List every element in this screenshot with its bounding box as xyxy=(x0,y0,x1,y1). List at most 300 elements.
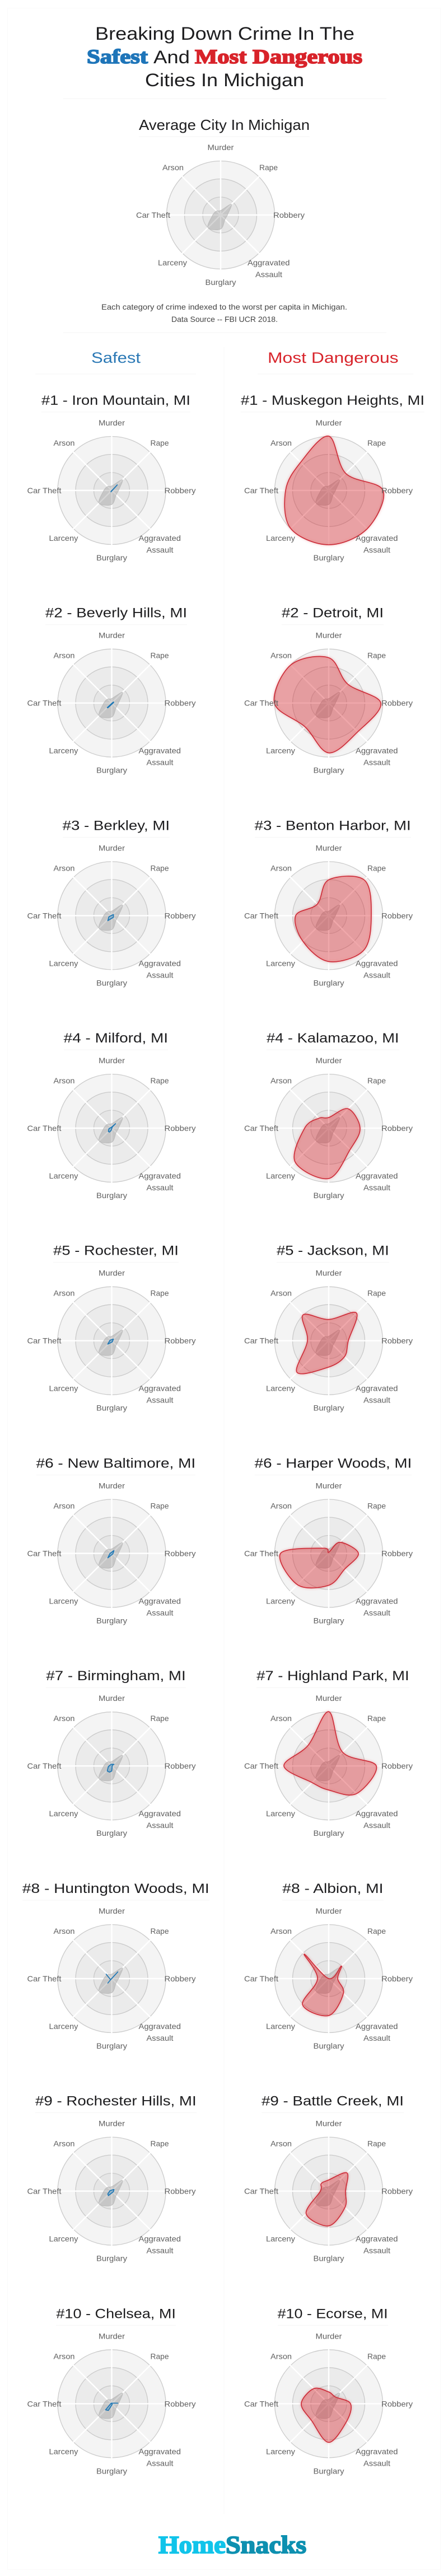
city title: #10 - Chelsea, MI xyxy=(56,2306,176,2321)
axis labels: Arson xyxy=(270,863,292,872)
axis labels: Burglary xyxy=(96,1404,127,1413)
axis labels: Burglary xyxy=(314,1829,344,1838)
axis labels: Rape xyxy=(367,1927,386,1935)
axis labels: Robbery xyxy=(381,699,413,708)
axis labels: Rape xyxy=(150,438,169,447)
radar chart xyxy=(244,418,413,562)
axis labels: Car Theft xyxy=(27,2399,62,2408)
axis labels: Burglary xyxy=(205,278,236,287)
radar chart xyxy=(27,1481,196,1625)
axis labels: Larceny xyxy=(49,959,78,967)
axis labels xyxy=(244,1906,413,2050)
axis labels: Burglary xyxy=(96,2254,127,2263)
axis labels: Murder xyxy=(316,418,342,427)
axis labels: Larceny xyxy=(266,1171,295,1180)
axis labels: Assault xyxy=(363,2246,390,2255)
axis labels: Arson xyxy=(54,651,75,660)
axis labels: Car Theft xyxy=(244,2399,278,2408)
city title: #1 - Iron Mountain, MI xyxy=(41,393,190,408)
radar grid xyxy=(273,2348,384,2459)
axis labels: Arson xyxy=(54,2351,75,2360)
city shape xyxy=(279,1542,358,1588)
axis labels: Car Theft xyxy=(27,1124,62,1133)
axis labels: Murder xyxy=(99,2331,125,2340)
radar chart xyxy=(27,2119,196,2263)
axis labels: Assault xyxy=(147,1183,174,1192)
panel: dangerous #7 Highland Park xyxy=(244,1668,413,1838)
axis labels: Burglary xyxy=(314,1616,344,1625)
axis labels: Arson xyxy=(54,2139,75,2148)
axis labels: Car Theft xyxy=(27,911,62,920)
axis labels: Murder xyxy=(316,631,342,640)
radar grid xyxy=(165,160,276,270)
radar chart xyxy=(244,1056,413,1200)
axis labels: Rape xyxy=(367,863,386,872)
axis labels: Car Theft xyxy=(244,486,278,495)
radar grid xyxy=(56,1498,167,1609)
axis labels: Rape xyxy=(150,2351,169,2360)
axis labels: Murder xyxy=(316,1269,342,1278)
axis labels: Assault xyxy=(363,1183,390,1192)
heading: most dangerous column: Most Dangerous xyxy=(268,349,399,366)
axis labels: Assault xyxy=(147,758,174,767)
radar chart xyxy=(244,1481,413,1625)
radar chart xyxy=(27,1906,196,2050)
axis labels: Larceny xyxy=(49,2234,78,2243)
axis labels: Arson xyxy=(270,651,292,660)
axis labels: Larceny xyxy=(266,2234,295,2243)
panel: dangerous #2 Detroit xyxy=(244,606,413,775)
city shape xyxy=(295,876,371,962)
axis labels: Aggravated xyxy=(139,2234,181,2243)
axis labels: Arson xyxy=(54,863,75,872)
axis labels xyxy=(27,1481,196,1625)
axis labels: Arson xyxy=(270,438,292,447)
city shape xyxy=(294,1109,360,1179)
city shape xyxy=(302,1954,344,2016)
axis labels: Assault xyxy=(147,970,174,979)
panel: dangerous #9 Battle Creek xyxy=(244,2094,413,2263)
axis labels: Murder xyxy=(316,2331,342,2340)
heading: safest column: Safest xyxy=(91,349,141,366)
axis labels: Murder xyxy=(316,2119,342,2128)
axis labels: Car Theft xyxy=(244,1761,278,1770)
axis labels: Aggravated xyxy=(248,258,290,267)
axis labels: Murder xyxy=(207,143,234,152)
axis labels: Murder xyxy=(99,631,125,640)
axis labels: Burglary xyxy=(314,553,344,562)
axis labels xyxy=(244,2119,413,2263)
axis labels: Robbery xyxy=(165,1974,196,1983)
city title: #6 - Harper Woods, MI xyxy=(255,1456,412,1471)
axis labels: Murder xyxy=(99,1694,125,1703)
axis labels: Car Theft xyxy=(27,1761,62,1770)
axis labels: Robbery xyxy=(165,1761,196,1770)
axis labels: Car Theft xyxy=(27,699,62,708)
axis labels: Car Theft xyxy=(244,1124,278,1133)
axis labels: Larceny xyxy=(49,2447,78,2456)
axis labels: Aggravated xyxy=(139,1809,181,1818)
axis labels xyxy=(244,843,413,987)
axis labels: Assault xyxy=(147,2033,174,2042)
axis labels: Larceny xyxy=(266,2447,295,2456)
axis labels: Car Theft xyxy=(27,1549,62,1558)
axis labels: Arson xyxy=(54,1289,75,1298)
axis labels: Robbery xyxy=(381,2187,413,2196)
axis labels xyxy=(244,1694,413,1838)
title: Cities In Michigan xyxy=(145,70,304,90)
title: Most Dangerous xyxy=(195,45,362,68)
axis labels: Robbery xyxy=(381,911,413,920)
axis labels: Assault xyxy=(147,2246,174,2255)
radar grid xyxy=(273,435,384,546)
axis labels: Assault xyxy=(363,1608,390,1617)
axis labels xyxy=(27,843,196,987)
city shape xyxy=(108,914,113,920)
axis labels: Robbery xyxy=(273,211,305,219)
radar chart xyxy=(244,1906,413,2050)
axis labels: Arson xyxy=(54,1502,75,1511)
city shape xyxy=(105,2403,118,2410)
city shape xyxy=(111,485,118,492)
radar chart xyxy=(244,843,413,987)
radar chart xyxy=(27,843,196,987)
axis labels: Robbery xyxy=(381,2399,413,2408)
title xyxy=(87,24,362,90)
axis labels: Rape xyxy=(367,1714,386,1723)
axis labels: Robbery xyxy=(381,1761,413,1770)
axis labels xyxy=(244,1269,413,1413)
footnote: Each category of crime indexed to the worst per capita in Michigan. xyxy=(101,302,347,311)
axis labels: Arson xyxy=(54,1076,75,1085)
panel: dangerous #5 Jackson xyxy=(244,1243,413,1413)
axis labels: Burglary xyxy=(314,2041,344,2050)
axis labels: Rape xyxy=(367,1502,386,1511)
axis labels: Car Theft xyxy=(27,1336,62,1345)
axis labels xyxy=(27,2331,196,2475)
axis labels: Aggravated xyxy=(139,2447,181,2456)
axis labels: Larceny xyxy=(158,258,187,267)
panel: dangerous #4 Kalamazoo xyxy=(244,1031,413,1200)
axis labels xyxy=(27,1269,196,1413)
axis labels: Larceny xyxy=(49,2022,78,2031)
panel: dangerous #10 Ecorse xyxy=(244,2306,413,2475)
panel: safest #3 Berkley xyxy=(27,818,196,987)
city title: #5 - Rochester, MI xyxy=(53,1243,179,1259)
city shape xyxy=(108,702,114,708)
axis labels: Burglary xyxy=(314,766,344,775)
city shape xyxy=(108,1551,114,1558)
axis labels: Rape xyxy=(367,2139,386,2148)
radar chart xyxy=(27,2331,196,2475)
panel: dangerous #1 Muskegon Heights xyxy=(241,393,424,562)
axis labels: Rape xyxy=(259,163,278,172)
axis labels: Larceny xyxy=(49,534,78,543)
axis labels xyxy=(27,418,196,562)
axis labels: Car Theft xyxy=(244,1336,278,1345)
city shape xyxy=(108,2190,114,2196)
axis labels: Robbery xyxy=(381,1549,413,1558)
radar grid xyxy=(56,2348,167,2459)
axis labels: Murder xyxy=(316,1906,342,1915)
city title: #4 - Kalamazoo, MI xyxy=(267,1031,399,1046)
axis labels: Robbery xyxy=(381,486,413,495)
axis labels: Rape xyxy=(150,863,169,872)
axis labels: Rape xyxy=(367,651,386,660)
city shape xyxy=(274,656,381,753)
axis labels: Arson xyxy=(270,2139,292,2148)
axis labels: Robbery xyxy=(165,1336,196,1345)
axis labels: Assault xyxy=(147,2458,174,2467)
axis labels: Assault xyxy=(363,1821,390,1830)
axis labels: Robbery xyxy=(165,486,196,495)
panel: safest #10 Chelsea xyxy=(27,2306,196,2475)
radar chart xyxy=(27,1269,196,1413)
footnote: Data Source -- FBI UCR 2018. xyxy=(171,315,278,324)
axis labels: Robbery xyxy=(381,1336,413,1345)
axis labels: Murder xyxy=(99,1906,125,1915)
radar grid xyxy=(273,1285,384,1396)
axis labels: Rape xyxy=(150,1076,169,1085)
city shape xyxy=(108,1764,114,1772)
axis labels: Robbery xyxy=(381,1124,413,1133)
axis labels xyxy=(27,631,196,775)
axis labels: Rape xyxy=(150,1502,169,1511)
footnote xyxy=(101,302,347,324)
axis labels: Burglary xyxy=(96,1829,127,1838)
axis labels: Assault xyxy=(147,1821,174,1830)
axis labels: Burglary xyxy=(96,766,127,775)
city shape xyxy=(284,1712,376,1795)
radar chart xyxy=(27,1056,196,1200)
axis labels: Larceny xyxy=(266,534,295,543)
axis labels: Robbery xyxy=(165,2399,196,2408)
axis labels: Burglary xyxy=(314,2466,344,2475)
axis labels: Rape xyxy=(150,651,169,660)
axis labels: Murder xyxy=(99,843,125,852)
axis labels: Burglary xyxy=(96,2041,127,2050)
axis labels: Larceny xyxy=(49,1171,78,1180)
title: Breaking Down Crime In The xyxy=(95,24,354,44)
axis labels: Robbery xyxy=(165,699,196,708)
axis labels xyxy=(136,143,305,287)
axis labels: Arson xyxy=(162,163,184,172)
axis labels: Murder xyxy=(316,1056,342,1065)
axis labels: Aggravated xyxy=(356,746,398,755)
axis labels: Arson xyxy=(54,438,75,447)
panel: dangerous #8 Albion xyxy=(244,1881,413,2050)
axis labels: Aggravated xyxy=(139,534,181,543)
axis labels: Assault xyxy=(363,2033,390,2042)
axis labels: Assault xyxy=(363,758,390,767)
axis labels: Murder xyxy=(316,1694,342,1703)
axis labels: Aggravated xyxy=(139,746,181,755)
axis labels: Arson xyxy=(54,1927,75,1935)
axis labels: Burglary xyxy=(96,1616,127,1625)
city shape xyxy=(108,1339,113,1344)
axis labels: Aggravated xyxy=(139,959,181,967)
axis labels: Car Theft xyxy=(244,1549,278,1558)
radar chart xyxy=(27,1694,196,1838)
axis labels: Aggravated xyxy=(356,1809,398,1818)
logo: HomeSnacks: Home xyxy=(158,2531,226,2559)
axis labels: Murder xyxy=(99,1056,125,1065)
axis labels: Aggravated xyxy=(356,1171,398,1180)
city shape xyxy=(306,2173,348,2226)
city title: #1 - Muskegon Heights, MI xyxy=(241,393,424,408)
panel: safest #1 Iron Mountain xyxy=(27,393,196,562)
radar grid xyxy=(56,435,167,546)
city shape xyxy=(301,2388,351,2442)
axis labels: Rape xyxy=(150,2139,169,2148)
panel: safest #6 New Baltimore xyxy=(27,1456,196,1625)
city shape xyxy=(296,1312,357,1374)
axis labels: Rape xyxy=(150,1714,169,1723)
axis labels: Murder xyxy=(99,1481,125,1490)
axis labels: Assault xyxy=(363,2458,390,2467)
radar grid xyxy=(273,860,384,971)
panel: safest #8 Huntington Woods xyxy=(22,1881,209,2050)
axis labels: Assault xyxy=(363,1396,390,1405)
axis labels: Aggravated xyxy=(139,1171,181,1180)
city title: #7 - Highland Park, MI xyxy=(256,1668,409,1684)
axis labels: Aggravated xyxy=(356,2447,398,2456)
axis labels: Burglary xyxy=(314,1404,344,1413)
axis labels: Car Theft xyxy=(27,2187,62,2196)
panel: safest #5 Rochester xyxy=(27,1243,196,1413)
axis labels: Murder xyxy=(316,843,342,852)
axis labels: Arson xyxy=(270,1502,292,1511)
axis labels: Aggravated xyxy=(356,2234,398,2243)
axis labels: Assault xyxy=(363,970,390,979)
city title: #7 - Birmingham, MI xyxy=(46,1668,186,1684)
radar grid xyxy=(56,1285,167,1396)
axis labels: Aggravated xyxy=(356,2022,398,2031)
logo: HomeSnacks xyxy=(158,2531,306,2559)
axis labels: Assault xyxy=(363,545,390,554)
axis labels xyxy=(27,1694,196,1838)
axis labels: Arson xyxy=(270,1076,292,1085)
axis labels xyxy=(27,1906,196,2050)
radar grid xyxy=(273,1923,384,2034)
axis labels: Car Theft xyxy=(244,699,278,708)
radar chart xyxy=(244,1269,413,1413)
axis labels: Car Theft xyxy=(244,2187,278,2196)
axis labels: Murder xyxy=(99,1269,125,1278)
title: Safest xyxy=(87,45,148,68)
heading: average city: Average City In Michigan xyxy=(139,116,310,133)
axis labels: Arson xyxy=(270,1714,292,1723)
radar chart xyxy=(244,631,413,775)
axis labels: Aggravated xyxy=(356,959,398,967)
axis labels: Larceny xyxy=(266,1809,295,1818)
axis labels: Rape xyxy=(367,1289,386,1298)
city title: #8 - Huntington Woods, MI xyxy=(22,1881,209,1896)
radar chart xyxy=(244,2331,413,2475)
axis labels: Murder xyxy=(99,2119,125,2128)
radar grid xyxy=(273,1710,384,1821)
city title: #4 - Milford, MI xyxy=(64,1031,168,1046)
axis labels: Car Theft xyxy=(244,1974,278,1983)
city title: #5 - Jackson, MI xyxy=(277,1243,389,1259)
axis labels: Arson xyxy=(270,2351,292,2360)
radar grid xyxy=(273,2136,384,2247)
axis labels: Robbery xyxy=(165,2187,196,2196)
axis labels: Car Theft xyxy=(136,211,170,219)
axis labels: Larceny xyxy=(266,2022,295,2031)
city title: #3 - Berkley, MI xyxy=(63,818,170,833)
radar chart xyxy=(27,418,196,562)
axis labels xyxy=(244,1056,413,1200)
city shape xyxy=(106,1972,118,1983)
axis labels: Larceny xyxy=(49,1809,78,1818)
city title: #10 - Ecorse, MI xyxy=(278,2306,388,2321)
axis labels: Burglary xyxy=(96,1191,127,1200)
axis labels: Assault xyxy=(147,1608,174,1617)
panel: safest #9 Rochester Hills xyxy=(27,2094,197,2263)
axis labels: Arson xyxy=(54,1714,75,1723)
axis labels: Murder xyxy=(316,1481,342,1490)
panel: safest #4 Milford xyxy=(27,1031,196,1200)
radar grid xyxy=(273,648,384,759)
panel: average city xyxy=(101,116,347,324)
axis labels: Arson xyxy=(270,1927,292,1935)
axis labels: Burglary xyxy=(314,978,344,987)
axis labels: Burglary xyxy=(314,2254,344,2263)
axis labels xyxy=(244,631,413,775)
axis labels xyxy=(244,1481,413,1625)
axis labels: Robbery xyxy=(165,911,196,920)
city shape xyxy=(109,1124,115,1132)
city title: #8 - Albion, MI xyxy=(282,1881,383,1896)
axis labels: Larceny xyxy=(266,746,295,755)
axis labels: Arson xyxy=(270,1289,292,1298)
city title: #6 - New Baltimore, MI xyxy=(36,1456,195,1471)
axis labels: Assault xyxy=(255,270,282,279)
panel: dangerous #6 Harper Woods xyxy=(244,1456,413,1625)
panel: safest #2 Beverly Hills xyxy=(27,606,196,775)
axis labels: Larceny xyxy=(266,1384,295,1393)
axis labels: Aggravated xyxy=(356,534,398,543)
axis labels: Assault xyxy=(147,1396,174,1405)
city title: #2 - Beverly Hills, MI xyxy=(45,606,187,621)
axis labels: Burglary xyxy=(314,1191,344,1200)
axis labels: Aggravated xyxy=(356,1597,398,1606)
axis labels xyxy=(244,418,413,562)
title: And xyxy=(153,47,190,67)
radar chart: average city xyxy=(136,143,305,287)
axis labels: Rape xyxy=(150,1289,169,1298)
axis labels: Murder xyxy=(99,418,125,427)
radar grid xyxy=(56,2136,167,2247)
axis labels xyxy=(244,2331,413,2475)
radar grid xyxy=(273,1073,384,1184)
panel: safest #7 Birmingham xyxy=(27,1668,196,1838)
radar chart xyxy=(244,1694,413,1838)
axis labels: Larceny xyxy=(266,959,295,967)
radar chart xyxy=(244,2119,413,2263)
axis labels xyxy=(27,1056,196,1200)
axis labels: Rape xyxy=(367,2351,386,2360)
radar grid xyxy=(56,648,167,759)
city title: #9 - Rochester Hills, MI xyxy=(35,2094,197,2109)
axis labels: Larceny xyxy=(49,746,78,755)
logo: HomeSnacks: Snacks xyxy=(226,2531,306,2559)
radar grid xyxy=(56,1923,167,2034)
city title: #3 - Benton Harbor, MI xyxy=(255,818,411,833)
axis labels: Robbery xyxy=(381,1974,413,1983)
axis labels: Rape xyxy=(367,1076,386,1085)
